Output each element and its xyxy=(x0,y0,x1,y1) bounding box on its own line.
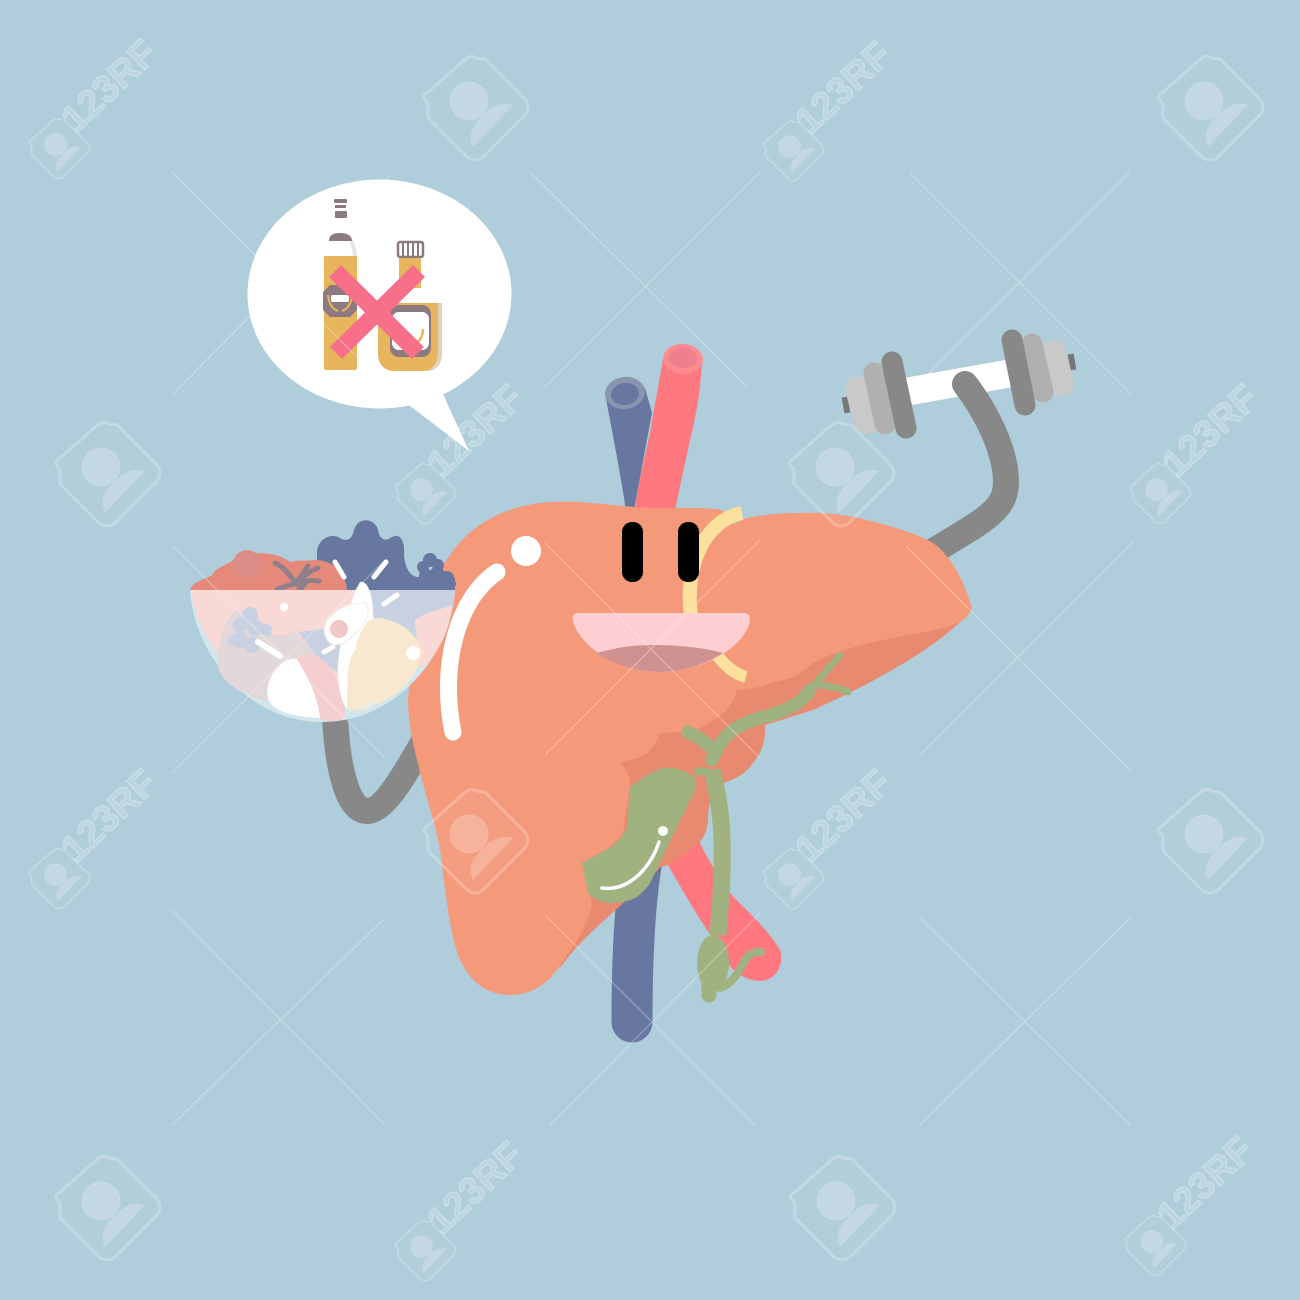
bile sac lower xyxy=(697,935,729,991)
duct main xyxy=(712,770,722,935)
yellow ligament xyxy=(690,513,742,628)
tomato leaf xyxy=(275,563,319,590)
watermarks: 123RF xyxy=(1149,1129,1262,1238)
grey vegetable xyxy=(218,611,310,706)
right arm with dumbbell xyxy=(842,340,1076,553)
gallbladder sac xyxy=(582,768,695,903)
watermarks: 123RF xyxy=(1154,377,1267,486)
avocado slice xyxy=(324,603,368,645)
hepatic vein top xyxy=(603,374,652,510)
salmon slice xyxy=(296,654,345,721)
salad bowl xyxy=(190,520,456,722)
salad dashes xyxy=(258,562,397,708)
left arm xyxy=(335,715,430,811)
watermarks: 123RF xyxy=(787,34,900,143)
arm xyxy=(930,384,1006,553)
egg piece white xyxy=(267,659,327,718)
aorta top xyxy=(635,343,704,510)
yellow ligament lower xyxy=(717,655,746,677)
liver shadow lobes xyxy=(540,608,972,968)
icon: liquor bottle xyxy=(378,242,443,371)
vein bottom xyxy=(632,860,642,1022)
tomatoes xyxy=(190,553,345,590)
icon: beer bottle xyxy=(323,199,357,370)
bowl glass xyxy=(190,590,455,722)
potato xyxy=(347,618,422,711)
watermarks: 123RF xyxy=(419,1134,532,1243)
watermarks: 123RF xyxy=(53,762,166,871)
white onion strip xyxy=(338,582,373,710)
gallbladder and bile ducts xyxy=(582,655,848,995)
lettuce xyxy=(317,520,455,590)
liver main body xyxy=(408,502,773,995)
artery bottom xyxy=(660,825,781,981)
broccoli xyxy=(417,553,456,590)
watermarks: 123RF xyxy=(53,32,166,141)
speech bubble xyxy=(248,180,512,451)
icon: red cross xyxy=(335,271,419,353)
watermarks: 123RF xyxy=(787,762,900,871)
watermarks: 123RF xyxy=(419,377,532,486)
liver right lobe xyxy=(698,513,972,684)
eyes xyxy=(622,522,699,582)
mouth xyxy=(573,613,750,672)
pale broccoli xyxy=(228,607,272,653)
gallbladder highlight xyxy=(602,842,659,888)
liver xyxy=(408,502,972,995)
dumbbell xyxy=(842,340,1076,428)
liver highlight xyxy=(448,536,541,732)
